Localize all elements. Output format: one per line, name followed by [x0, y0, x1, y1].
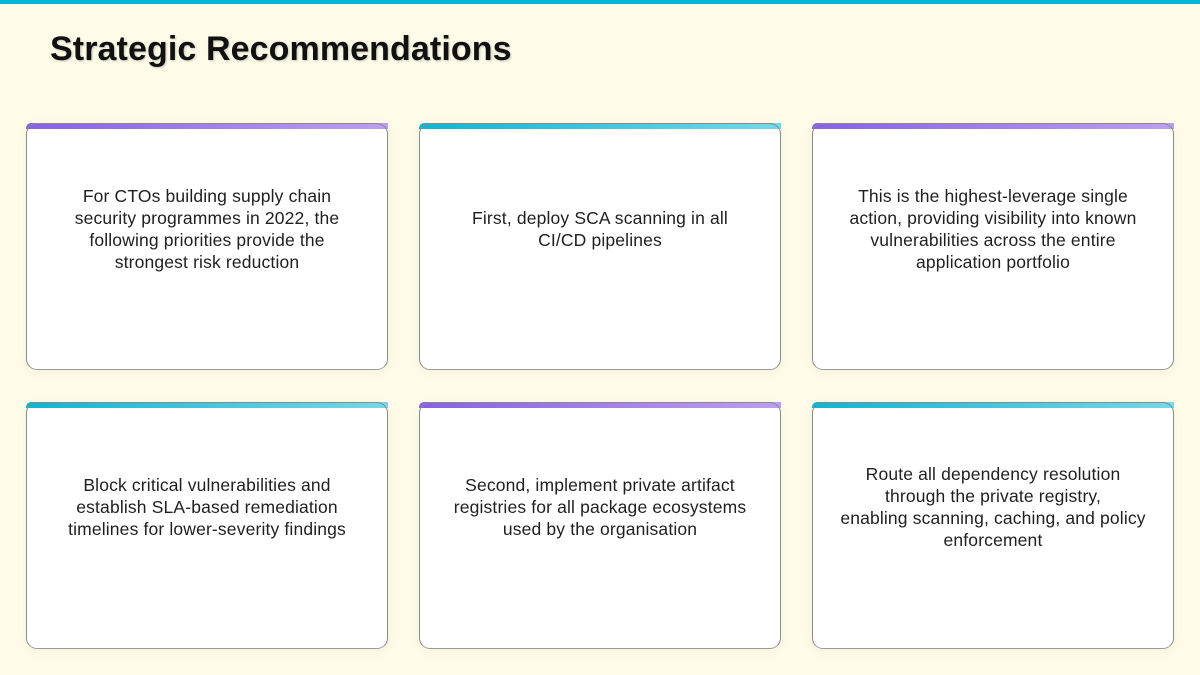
- panel: card 2: [419, 123, 781, 370]
- card 5 border: [419, 402, 781, 649]
- card 2 border: [419, 123, 781, 370]
- card 4 border: [26, 402, 388, 649]
- card 2 text: CI/CD pipelines: [538, 230, 662, 250]
- card 1 border: [26, 123, 388, 370]
- card 5 text: used by the organisation: [503, 519, 697, 539]
- panel: card 1: [26, 123, 388, 370]
- card 3 text: This is the highest-leverage single: [858, 186, 1128, 206]
- card 3 text: [850, 186, 1136, 272]
- panel: card 6: [812, 402, 1174, 649]
- card 3 text: action, providing visibility into known: [850, 208, 1136, 228]
- card 1 text: following priorities provide the: [89, 230, 325, 250]
- card 1 text: strongest risk reduction: [115, 252, 299, 272]
- card 2 accent bar: [419, 123, 781, 129]
- card 4 accent bar: [26, 402, 388, 408]
- card 4 text: Block critical vulnerabilities and: [83, 475, 331, 495]
- card 6 text: enabling scanning, caching, and policy: [840, 508, 1146, 528]
- panel: card 4: [26, 402, 388, 649]
- card 4 text: establish SLA-based remediation: [76, 497, 338, 517]
- card 5 text: [454, 475, 746, 539]
- top accent bar: [0, 0, 1200, 4]
- card 6 text: through the private registry,: [885, 486, 1101, 506]
- panel: card 5: [419, 402, 781, 649]
- panel: card 3: [812, 123, 1174, 370]
- card 3 border: [812, 123, 1174, 370]
- card 2 text: First, deploy SCA scanning in all: [472, 208, 728, 228]
- card 6 text: Route all dependency resolution: [866, 464, 1120, 484]
- card 6 text: [840, 464, 1146, 550]
- card 4 text: timelines for lower-severity findings: [68, 519, 346, 539]
- card 1 text: [75, 186, 339, 272]
- card 6 border: [812, 402, 1174, 649]
- card 1 text: For CTOs building supply chain: [83, 186, 331, 206]
- card 1 accent bar: [26, 123, 388, 129]
- card 6 accent bar: [812, 402, 1174, 408]
- card 3 text: application portfolio: [916, 252, 1070, 272]
- card 5 text: Second, implement private artifact: [465, 475, 735, 495]
- card 6 text: enforcement: [944, 530, 1042, 550]
- title: Strategic Recommendations: [50, 30, 512, 68]
- card 3 accent bar: [812, 123, 1174, 129]
- card 2 text: [472, 208, 728, 250]
- card 5 accent bar: [419, 402, 781, 408]
- card 4 text: [68, 475, 346, 539]
- card 3 text: vulnerabilities across the entire: [870, 230, 1116, 250]
- card 1 text: security programmes in 2022, the: [75, 208, 339, 228]
- card 5 text: registries for all package ecosystems: [454, 497, 746, 517]
